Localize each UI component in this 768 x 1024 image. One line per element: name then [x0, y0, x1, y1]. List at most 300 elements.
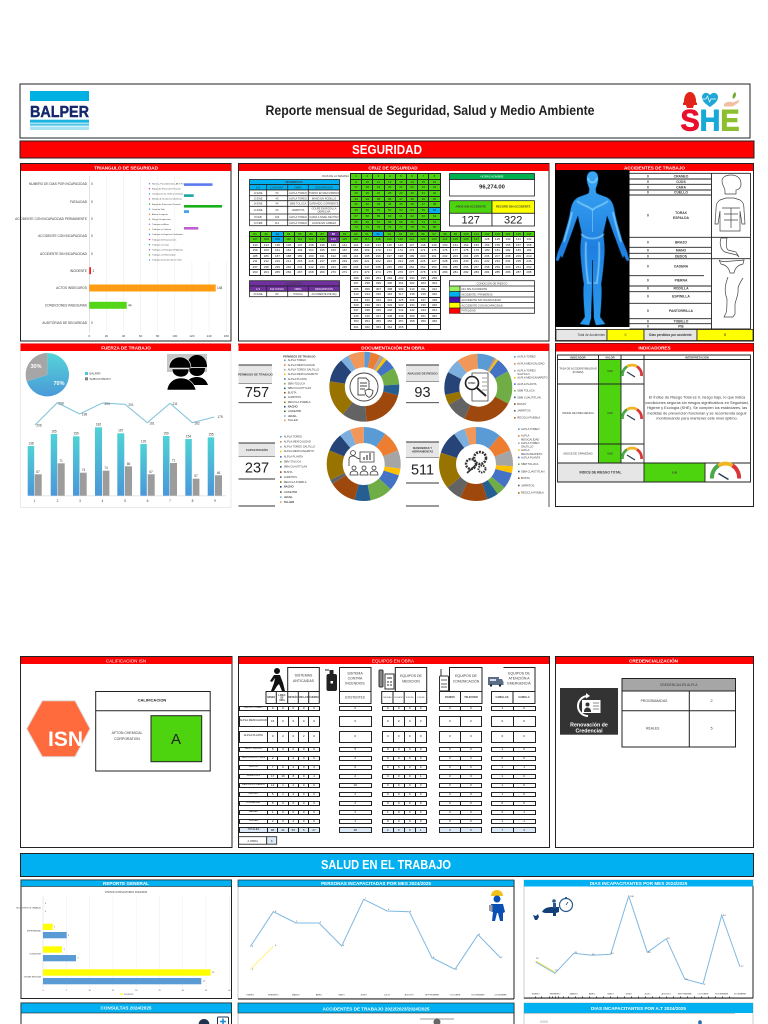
bar and line chart: personnel by week: 74	[82, 468, 85, 472]
chart: safety cross, horizontal arm: 131	[516, 237, 521, 241]
group header: equipos de medicion	[382, 668, 427, 704]
chart: safety cross, horizontal arm: 188	[286, 254, 291, 258]
table: equipment rows: 0	[420, 801, 422, 805]
chart: safety cross, upper arm: 34	[366, 197, 369, 201]
chart: safety cross, horizontal arm: 265	[275, 270, 280, 274]
bar chart: visitas consultorio: 3	[64, 949, 66, 951]
line chart: persons per month: FEBRERO	[268, 994, 279, 996]
chart: safety cross, horizontal arm: 235	[516, 259, 521, 263]
legend: condicion de riesgo: INCIDENTE / PRIMEROS	[462, 292, 493, 296]
table: equipment rows: 0	[523, 801, 525, 805]
legend: herramientas: BUSTA	[521, 476, 530, 480]
legend: workforce	[85, 372, 112, 381]
icon: fall protection worker	[270, 668, 285, 691]
table: body parts: PIERNA	[675, 278, 688, 282]
table: equipment rows: 0	[387, 774, 389, 778]
bar chart: safety triangle: 160	[224, 334, 229, 338]
legend: capacitacion: LINDE/IBM	[284, 490, 298, 494]
line chart: persons per month: SEPTIEMBRE	[425, 994, 440, 996]
section banner: salud en el trabajo: SALUD EN EL TRABAJO	[321, 857, 451, 872]
bar and line chart: personnel by week	[28, 402, 226, 503]
chart: safety cross, upper arm: 38	[410, 197, 414, 201]
metric: capacitacion: CAPACITACIÓN	[246, 447, 268, 452]
chart: safety cross, horizontal arm: 222	[376, 259, 381, 263]
chart: safety cross, horizontal arm: 137	[297, 243, 302, 247]
text: interpretation: condiciones seguras sin riesgos significativos en Seguridad,	[645, 400, 749, 405]
table: equipment rows: 0	[470, 706, 472, 710]
panel: cruz de seguridad	[238, 164, 549, 341]
chart: safety cross, horizontal arm: 279	[432, 270, 437, 274]
table: incidencias: JARRITOS	[292, 208, 305, 212]
chart: safety cross, upper arm: 61	[399, 214, 403, 218]
group header: sistema contra incendios	[340, 668, 371, 704]
chart: safety cross, horizontal arm: 274	[376, 270, 381, 274]
legend: condicion de riesgo: CONDICION DE RIESGO	[476, 282, 508, 286]
label: dias de la semana: DIAS DE LA SEMANA	[322, 174, 349, 178]
chart: safety cross, upper arm: 53	[399, 208, 403, 212]
legend: condicion de riesgo: ACCIDENTE CON INCAPACIDAD	[462, 303, 503, 307]
chart: safety cross, lower arm: 355	[376, 319, 381, 323]
table: body parts: OJOS	[676, 180, 686, 184]
table: equipment rows: 0	[303, 756, 305, 760]
chart: safety cross, horizontal arm: 86	[309, 232, 313, 236]
chart: safety cross, horizontal arm: 219	[342, 259, 347, 263]
chart: safety cross, lower arm: 357	[398, 319, 403, 323]
table: equipment rows: 0	[354, 706, 356, 710]
table: equipment rows: 0	[387, 765, 389, 769]
icon: total gauge	[712, 464, 739, 480]
logo: BALPER: BALPER	[30, 104, 89, 121]
chart: safety cross, horizontal arm: 181	[495, 248, 500, 252]
legend: analisis de riesgo: SBM TOLUCA	[517, 389, 535, 393]
bar chart: visitas consultorio: 5	[66, 990, 68, 992]
chart: safety cross, horizontal arm: 260	[505, 265, 510, 269]
table: equipment rows: 2	[292, 783, 294, 787]
legend: audit categories: Línea de Vida	[152, 209, 166, 211]
table: equipment rows: 0	[303, 792, 305, 796]
heading: calificacion ISN: CALIFICACION ISN	[106, 658, 146, 664]
chart: safety cross, horizontal arm: 81	[253, 232, 257, 236]
legend: analisis de riesgo: RECICLA PUEBLA	[517, 416, 540, 420]
icon: gauge	[622, 408, 642, 420]
bar chart: visitas consultorio: ACCIDENTE DE TRABAJO	[16, 906, 41, 910]
bar chart: visitas consultorio: 0	[45, 903, 47, 905]
chart: safety cross, horizontal arm: 187	[275, 254, 280, 258]
legend: condicion de riesgo: FATALIDAD	[462, 309, 476, 313]
icon: stopwatch and desk	[533, 897, 572, 920]
legend: permisos de trabajo: LINDE/IBM	[288, 409, 302, 413]
table: credenciales	[622, 678, 736, 747]
table: equipment rows: 0	[409, 765, 411, 769]
table: calificacion: CORPORATION	[114, 737, 140, 741]
table: equipment rows: 0	[313, 765, 315, 769]
table: equipment rows: 5	[354, 747, 356, 751]
chart: safety cross, horizontal arm: 264	[264, 270, 269, 274]
bar chart: visitas consultorio: 1	[54, 926, 56, 928]
legend: capacitacion: NACHO	[284, 485, 294, 489]
table: equipment rows: 0	[303, 719, 305, 723]
legend: permisos de trabajo: PERMISOS DE TRABAJO	[283, 354, 315, 358]
chart: safety cross, upper arm: 48	[433, 202, 436, 206]
table: equipment rows: 0	[272, 706, 273, 710]
chart: safety cross, lower arm: 302	[410, 281, 415, 285]
bar and line chart: personnel by week: 67	[36, 470, 40, 474]
bar chart: visitas consultorio: 0	[45, 911, 47, 913]
table: incidencias: 43	[276, 196, 279, 200]
chart: safety cross, horizontal arm: 172	[398, 248, 403, 252]
bar and line chart: personnel by week: 196	[82, 412, 87, 416]
table: body parts: 0	[647, 185, 649, 189]
table: equipment rows: 1	[502, 774, 503, 778]
table: equipment rows: 5	[272, 801, 273, 805]
chart: safety cross, upper arm: 43	[377, 202, 380, 206]
table: equipment rows: 1	[502, 819, 503, 823]
group header: sistema contra incendios: SISTEMA	[347, 672, 363, 676]
table: equipment rows: 0	[523, 747, 525, 751]
line chart: persons per month: 6	[388, 909, 390, 911]
heading: dias incapacitantes por mes: DIAS INCAPACITANTES POR MES 2024/2025	[590, 881, 688, 886]
table: equipment rows: 0	[303, 747, 305, 751]
chart: safety cross, horizontal arm: 195	[364, 254, 369, 258]
table: equipment rows: 0	[470, 734, 472, 738]
table: credenciales: REALES	[646, 726, 660, 730]
line chart: persons per month: 3	[501, 957, 503, 959]
bar and line chart: personnel by week: 201	[128, 403, 134, 407]
chart: safety cross, horizontal arm: 220	[353, 259, 358, 263]
table: equipment rows: 0	[420, 783, 422, 787]
table: equipment rows: 1	[387, 810, 389, 814]
chart: safety cross, horizontal arm: 255	[453, 265, 458, 269]
table: equipment rows: 1	[523, 819, 525, 823]
chart: safety cross, horizontal arm: 178	[463, 248, 468, 252]
icon: classroom	[349, 451, 378, 475]
table: equipment rows: 0	[398, 810, 400, 814]
line chart: days per month: NOVIEMBRE	[715, 994, 729, 996]
heading: equipos en obra: EQUIPOS EN OBRA	[372, 658, 414, 664]
chart: safety cross, lower arm: 322	[365, 298, 370, 302]
line chart: days per month: 12	[555, 970, 558, 972]
table: equipment rows: 0	[292, 747, 294, 751]
total de accidentes row: 0	[625, 333, 627, 337]
bar and line chart: personnel by week: 4	[102, 499, 104, 503]
legend: permisos de trabajo: ALPLA TOREO	[288, 358, 306, 362]
legend: analisis de riesgo: SBM CUAUTITLAN	[517, 395, 541, 399]
table: body parts: CARA	[676, 185, 686, 189]
heading: consultas: CONSULTAS 2024/2025	[101, 1006, 152, 1010]
table: equipment rows: 0	[409, 819, 411, 823]
table: equipment rows: 3	[523, 828, 525, 832]
table: equipment rows: 0	[387, 756, 389, 760]
chart: safety cross, lower arm: 301	[398, 281, 403, 285]
heading: credencializacion: CREDENCIALIZACIÓN	[629, 656, 679, 664]
report title: Reporte mensual de Seguridad, Salud y Medio Ambiente	[266, 103, 595, 118]
table: equipment rows: 0	[470, 783, 472, 787]
table: equipment rows: 0	[523, 792, 525, 796]
legend: permisos de trabajo	[283, 354, 319, 422]
table: body parts: ESPINILLA	[672, 294, 690, 298]
legend: herramientas: ALPLA	[521, 448, 530, 452]
table: equipment rows: 0	[449, 706, 451, 710]
table: equipment rows: 0	[282, 819, 284, 823]
chart: safety cross, horizontal arm: 189	[297, 254, 302, 258]
table: equipment rows: 0	[420, 765, 422, 769]
chart: safety cross, upper arm: 40	[433, 197, 436, 201]
bar and line chart: personnel by week: 162	[194, 422, 200, 426]
chart: safety cross, upper arm: 42	[366, 202, 369, 206]
bar chart: visitas consultorio: VISITAS MEDICAS	[24, 976, 42, 978]
table: equipment rows: 5	[303, 828, 305, 832]
chart: safety cross, horizontal arm: 155	[495, 243, 500, 247]
chart: safety cross, lower arm: 344	[432, 308, 437, 312]
table: body parts: PIE	[678, 324, 684, 328]
table: equipment rows: 0	[292, 810, 294, 814]
table: incidencias: 114	[275, 221, 280, 225]
table: equipment rows: 0	[313, 734, 315, 738]
table: equipment rows: 0	[387, 734, 389, 738]
table: equipment rows: 2	[354, 810, 356, 814]
chart: safety cross, horizontal arm: 169	[364, 248, 369, 252]
chart: safety cross, horizontal arm: 236	[526, 259, 531, 263]
image: credential renewal card: Renovación de	[570, 722, 608, 728]
section banner: SEGURIDAD	[20, 141, 754, 158]
group header: equipos de medicion: MEDICION	[402, 680, 420, 684]
bar and line chart: personnel by week: 1	[34, 499, 36, 503]
chart: safety cross, horizontal arm: 160	[264, 248, 269, 252]
chart: safety cross, horizontal arm: 242	[309, 265, 314, 269]
bar chart: visitas consultorio: 10	[88, 990, 92, 992]
table: incidencias: 50	[276, 191, 279, 195]
chart: safety cross, lower arm: 290	[365, 276, 370, 280]
table: incidencias: SBM TOLUCA	[290, 202, 307, 206]
line chart: days per month: 29	[536, 958, 539, 960]
chart: safety cross, horizontal arm: 253	[432, 265, 437, 269]
table: equipment rows: 2	[292, 765, 294, 769]
chart: safety cross, horizontal arm: 218	[331, 259, 336, 263]
chart: safety cross, lower arm: 305	[354, 287, 359, 291]
icon: gauge	[622, 448, 642, 460]
line chart: days per month: 38	[648, 952, 651, 954]
table: equipment rows: 0	[387, 747, 389, 751]
table: equipment rows: 0	[420, 719, 422, 723]
legend: audit categories: Riesgo Ocupacional	[152, 219, 171, 221]
bar and line chart: personnel by week: 3	[79, 499, 81, 503]
chart: safety cross, upper arm: 67	[377, 220, 380, 224]
bar and line chart: personnel by week: 154	[186, 434, 191, 438]
heading: reporte general	[21, 880, 232, 886]
chart: safety cross, horizontal arm: 118	[376, 237, 381, 241]
bar chart: visitas consultorio: 23	[212, 972, 215, 974]
chart: safety cross, lower arm: 320	[432, 292, 437, 296]
legend: analisis de riesgo	[514, 355, 548, 420]
table: equipment rows: 0	[449, 828, 451, 832]
bar chart: safety triangle: ACCIDENTE CON INCAPACIDAD	[38, 234, 88, 238]
table: equipment rows: 0	[387, 719, 389, 723]
table: equipment rows: 0	[409, 747, 411, 751]
chart: safety cross, lower arm: 354	[365, 319, 370, 323]
table: equipment rows: 0	[420, 819, 422, 823]
bar chart: visitas consultorio: ENFERMEDAD	[27, 930, 42, 932]
line chart: persons per month: MAYO	[339, 994, 345, 996]
chart: safety cross, lower arm: 349	[398, 314, 403, 318]
table: body parts: TORAX	[675, 211, 688, 215]
chart: safety cross, horizontal arm: 237	[253, 265, 258, 269]
chart: safety cross, lower arm: 345	[354, 314, 359, 318]
table: equipment rows: 0	[470, 810, 472, 814]
table: equipment rows: 0	[282, 719, 284, 723]
heading: dias incapacitantes por A.T	[524, 1003, 753, 1013]
chart: safety cross, horizontal arm: 202	[442, 254, 447, 258]
chart: safety cross, horizontal arm: 221	[364, 259, 369, 263]
chart: safety cross, lower arm: 358	[410, 319, 415, 323]
metric: herramientas: HERRAMIENTAS	[412, 449, 433, 453]
table: equipment rows: 0	[470, 719, 472, 723]
icon: blue worker with helmet	[489, 890, 505, 921]
table: equipment rows: 55	[292, 828, 295, 832]
chart: safety cross, horizontal arm: 103	[495, 232, 500, 236]
table: equipment rows: 0	[303, 765, 305, 769]
legend: audit categories: Trabajos en Caliente	[152, 228, 172, 231]
chart: safety cross, horizontal arm: 142	[353, 243, 358, 247]
chart: safety cross, lower arm: 293	[398, 276, 403, 280]
chart: safety cross, horizontal arm: 259	[495, 265, 500, 269]
table: equipment rows: 0	[303, 810, 305, 814]
chart: safety cross, horizontal arm: 217	[320, 259, 325, 263]
table: accidentes: 80	[276, 292, 279, 296]
legend: audit categories: Trabajos en Espacios Confinados	[152, 233, 183, 236]
chart: safety cross, upper arm: 50	[366, 208, 369, 212]
chart: safety cross, lower arm: 307	[376, 287, 381, 291]
chart: safety cross, upper arm: 8	[434, 174, 435, 178]
table: incidencias: 13 ENE	[254, 196, 263, 200]
chart: safety cross, upper arm: 60	[388, 214, 391, 218]
cell: a obra	[239, 837, 277, 844]
panel: consultas 2024/2025	[21, 1003, 232, 1024]
chart: safety cross, horizontal arm: 123	[432, 237, 437, 241]
bar chart: safety triangle: 0	[91, 182, 93, 186]
table: equipment rows: 0	[303, 819, 305, 823]
chart: safety cross, horizontal arm: 110	[286, 237, 291, 241]
table: body parts: 0	[647, 319, 649, 323]
chart: safety cross, upper arm: 12	[388, 180, 391, 184]
chart: safety cross, upper arm: 69	[399, 220, 403, 224]
group header: equipos de comunicacion: COMUNICACIÓN	[453, 678, 480, 684]
line chart: persons per month: JULIO	[384, 994, 390, 996]
table: equipment rows: 6	[354, 765, 356, 769]
panel: dias incapacitantes por mes	[524, 880, 753, 998]
legend: audit categories: Manejo de Sustancias Químicas	[152, 198, 182, 201]
legend: analisis de riesgo: BUSTA	[517, 402, 526, 406]
table: indicators: VALOR	[605, 355, 615, 359]
table: equipment rows: 0	[449, 747, 451, 751]
chart: safety cross, lower arm: 363	[376, 325, 381, 329]
chart: safety cross, lower arm: 292	[387, 276, 392, 280]
legend: workforce: SUBCONTRATO	[90, 377, 112, 381]
chart: safety cross, horizontal arm: 170	[376, 248, 381, 252]
legend: audit categories: Trabajos con Izaje	[152, 243, 170, 246]
table: incidencias	[250, 180, 340, 226]
chart: safety cross, upper arm: 35	[377, 197, 380, 201]
group header: equipos de atencion a emergencia: CAMILLA	[518, 696, 530, 699]
chart: safety cross, horizontal arm: 227	[432, 259, 437, 263]
legend: capacitacion: ALPLA MEXICALIDAD	[284, 440, 311, 444]
group header: equipos de atencion a emergencia: ATENCIÓN A	[509, 676, 530, 680]
chart: safety cross, horizontal arm: 163	[297, 248, 302, 252]
chart: safety cross, horizontal arm: 191	[320, 254, 325, 258]
chart: safety cross, horizontal arm: 281	[453, 270, 458, 274]
table: equipment rows: 0	[354, 719, 356, 723]
table: equipment rows: 5	[272, 747, 273, 751]
panel: dias incapacitantes por A.T	[524, 1003, 753, 1024]
bar chart: safety triangle: 0	[91, 321, 93, 325]
table: body parts: DEDOS	[675, 254, 688, 258]
chart: safety cross, horizontal arm: 199	[409, 254, 414, 258]
chart: safety cross, lower arm: 364	[387, 325, 392, 329]
legend: permisos de trabajo: ALPLA MEXICANAPETO	[288, 372, 318, 376]
logo: SHE: SHE	[680, 104, 740, 138]
chart: safety cross, horizontal arm: 107	[253, 237, 258, 241]
chart: safety cross, horizontal arm: 125	[453, 237, 458, 241]
bar chart: visitas consultorio: 2024/2025	[124, 994, 134, 996]
chart: safety cross, upper arm: 22	[410, 185, 414, 189]
table: equipment rows: 0	[420, 756, 422, 760]
chart: safety cross, horizontal arm: 210	[526, 254, 531, 258]
heading: documentacion en obra: DOCUMENTACIÓN EN OBRA	[361, 343, 425, 350]
chart: safety cross, lower arm: 296	[432, 276, 437, 280]
table: incidencias: INCIDENCIAS	[286, 180, 303, 184]
line chart: days per month: 35	[574, 952, 578, 954]
legend: audit categories: Normas, Procedimientos, AST, Permisos	[152, 182, 189, 186]
chart: safety cross, horizontal arm: 215	[297, 259, 302, 263]
chart: safety cross, lower arm: 300	[387, 281, 392, 285]
chart: safety cross, horizontal arm: 285	[495, 270, 500, 274]
chart: safety cross, lower arm: 353	[354, 319, 359, 323]
chart: safety cross, upper arm: 13	[399, 180, 403, 184]
chart: safety cross, lower arm: 343	[421, 308, 426, 312]
chart: safety cross, horizontal arm: 133	[253, 243, 258, 247]
chart: safety cross, upper arm: 66	[366, 220, 369, 224]
bar chart: visitas consultorio: 4	[78, 958, 80, 960]
table: equipment rows: 6	[282, 765, 284, 769]
chart: safety cross, horizontal arm: 186	[264, 254, 269, 258]
metric: analisis de riesgo: ANALISIS DE RIESGO	[407, 372, 438, 376]
legend: permisos de trabajo: TALLER	[288, 418, 298, 422]
chart: safety cross, horizontal arm: 167	[342, 248, 347, 252]
bar and line chart: personnel by week: 138	[28, 442, 34, 446]
legend: workforce: BALPER	[90, 372, 101, 376]
line chart: days per month: JUNIO	[625, 994, 632, 996]
chart: safety cross, upper arm	[350, 173, 441, 231]
bar chart: visitas consultorio: 20	[135, 990, 138, 992]
chart: safety cross, horizontal arm: 153	[474, 243, 479, 247]
chart: safety cross, upper arm: 73	[354, 225, 358, 229]
chart: safety cross, horizontal arm: 204	[463, 254, 468, 258]
legend: herramientas: ALPLA TOREO	[521, 427, 539, 431]
chart: safety cross, lower arm: 316	[387, 292, 392, 296]
legend: herramientas: MEXICALIDAD	[521, 437, 539, 441]
legend: herramientas: MEXICANAPETO	[521, 452, 542, 456]
chart: safety cross, horizontal arm: 99	[454, 232, 457, 236]
chart: safety cross, upper arm: 78	[410, 225, 414, 229]
chart: safety cross, upper arm: 58	[366, 214, 369, 218]
chart: safety cross, lower arm: 332	[387, 303, 392, 307]
panel: personas incapacitadas por mes	[238, 880, 514, 999]
chart: safety cross, horizontal arm: 284	[484, 270, 489, 274]
panel: fuerza de trabajo	[20, 344, 231, 508]
bar and line chart: personnel by week: 161	[149, 422, 155, 426]
line chart: persons per month	[246, 898, 507, 996]
total de accidentes row	[556, 330, 753, 340]
bar and line chart: personnel by week: 71	[59, 459, 63, 463]
